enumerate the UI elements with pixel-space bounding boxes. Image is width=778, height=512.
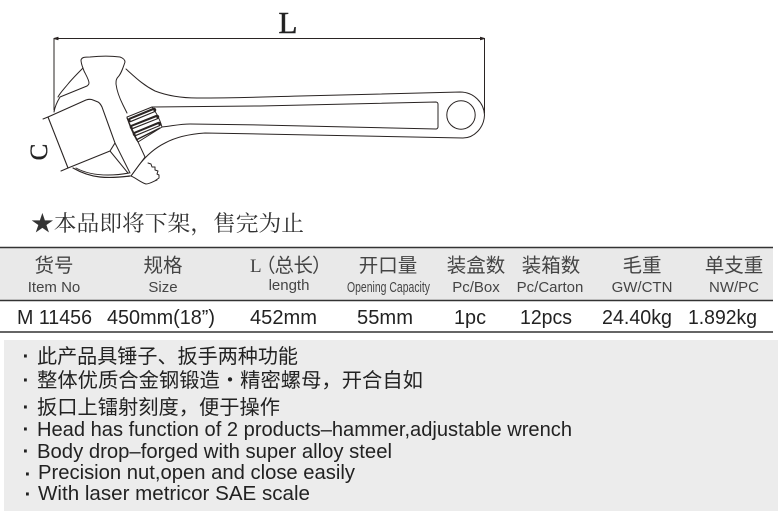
column: gross weight: 24.40kg <box>602 307 672 329</box>
column: pieces per carton: Pc/Carton <box>517 279 583 296</box>
Chinese feature lines: · <box>23 397 29 419</box>
English feature lines: · <box>23 419 29 441</box>
features panel <box>4 340 778 511</box>
column: pieces per box: 1pc <box>454 307 486 329</box>
column: pieces per carton <box>517 255 583 329</box>
column: pieces per carton: 12pcs <box>520 307 572 329</box>
discontinued notice: ★本品即将下架，售完为止 <box>31 211 304 237</box>
column: item number: Item No <box>28 279 80 296</box>
column: length: 452mm <box>250 307 317 329</box>
column: opening capacity: 55mm <box>357 307 413 329</box>
column: pieces per carton: 装箱数 <box>522 255 580 277</box>
column: item number <box>17 255 92 329</box>
column: net weight: 单支重 <box>705 255 763 277</box>
column: item number: M 11456 <box>17 307 92 329</box>
English feature lines: Body drop–forged with super alloy steel <box>37 441 392 463</box>
English feature lines: With laser metricor SAE scale <box>38 483 310 505</box>
column: size: 规格 <box>143 255 183 277</box>
English feature lines: Head has function of 2 products–hammer,adjustable wrench <box>37 419 572 441</box>
English feature lines: · <box>25 464 31 486</box>
column: net weight <box>688 255 763 329</box>
column: pieces per box: Pc/Box <box>452 279 500 296</box>
panel background <box>4 340 778 511</box>
column: item number: 货号 <box>34 255 74 277</box>
column: gross weight: GW/CTN <box>612 279 672 296</box>
handle slot <box>152 102 438 129</box>
English feature lines: · <box>25 484 31 506</box>
column: length: length <box>269 277 309 294</box>
column: length: （总长） <box>256 255 332 277</box>
label L: L <box>279 5 297 40</box>
column: size: Size <box>148 279 178 296</box>
column: gross weight: 毛重 <box>622 255 662 277</box>
Chinese feature lines: · <box>23 346 29 368</box>
specification table <box>0 248 773 332</box>
column: opening capacity <box>347 255 430 329</box>
column: gross weight <box>602 255 672 329</box>
column: pieces per box: 装盒数 <box>447 255 505 277</box>
Chinese feature lines: 整体优质合金钢锻造・精密螺母，开合自如 <box>37 369 423 392</box>
column: size <box>107 255 215 329</box>
column: opening capacity: 开口量 <box>359 255 417 277</box>
wrench technical drawing <box>26 5 484 184</box>
column: size: 450mm(18”) <box>107 307 215 329</box>
end hole <box>447 101 475 129</box>
label C: C <box>26 144 53 160</box>
Chinese feature lines <box>23 345 423 419</box>
column: pieces per box <box>447 255 505 329</box>
English feature lines: Precision nut,open and close easily <box>38 462 355 484</box>
column: length: L <box>250 256 262 277</box>
column: net weight: 1.892kg <box>688 307 757 329</box>
Chinese feature lines: · <box>23 370 29 392</box>
English feature lines <box>23 419 572 506</box>
Chinese feature lines: 扳口上镭射刻度，便于操作 <box>37 396 280 419</box>
column: length <box>250 255 332 329</box>
wrench head and handle outline <box>43 56 484 184</box>
English feature lines: · <box>23 441 29 463</box>
table header background <box>0 248 773 300</box>
adjusting nut <box>127 107 162 142</box>
Chinese feature lines: 此产品具锤子、扳手两种功能 <box>37 345 298 368</box>
dimension line L <box>54 37 484 113</box>
column: opening capacity: Opening Capacity <box>347 279 430 296</box>
column: net weight: NW/PC <box>709 279 759 296</box>
